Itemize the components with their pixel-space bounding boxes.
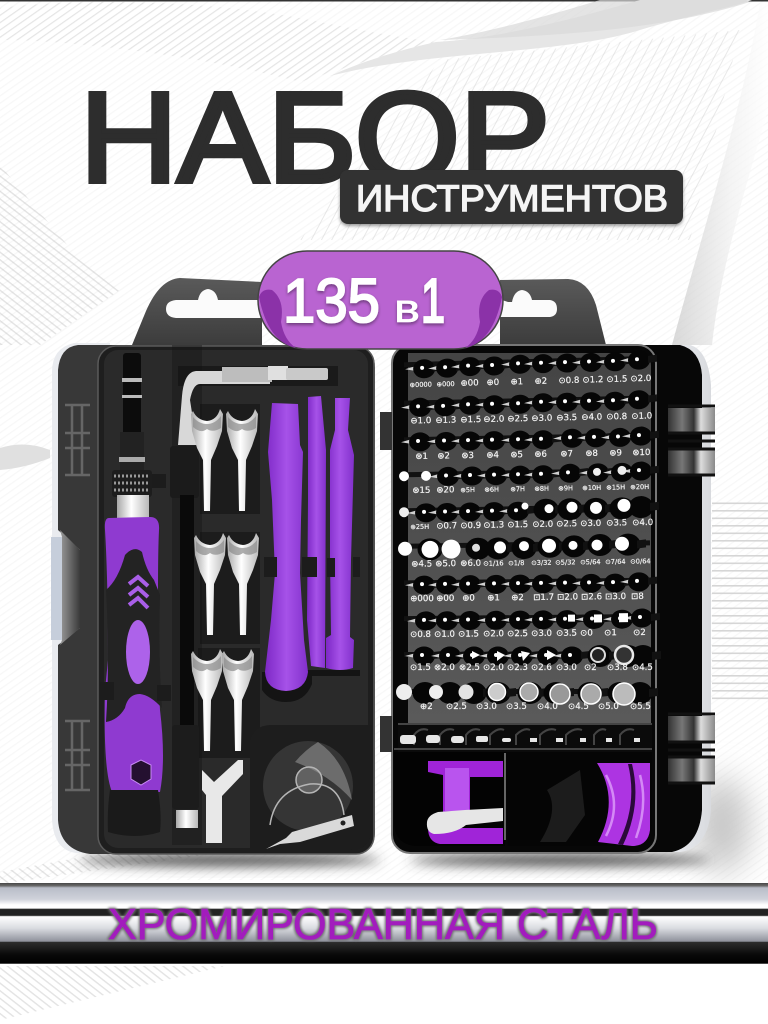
right latches xyxy=(380,406,715,783)
row 10: ⊙5.5 xyxy=(630,702,651,712)
row 7: ⊕000 xyxy=(410,594,434,604)
row 8: ⊙0 xyxy=(580,628,593,639)
row 4: ⊛20H xyxy=(630,483,649,491)
row 5: ⊛25H xyxy=(410,523,429,531)
row 1: ⊙1.5 xyxy=(606,374,627,385)
row 6: ⊙1/16 xyxy=(483,559,504,568)
purple pry tools xyxy=(265,396,354,691)
row 7: ⊡2.6 xyxy=(581,592,602,602)
row 6: ⊙5/32 xyxy=(555,558,576,567)
subtitle label: ИНСТРУМЕНТОВ xyxy=(356,178,668,219)
row 6: ⊙7/64 xyxy=(605,558,626,566)
row 4: ⊛7H xyxy=(510,485,525,493)
row 9: ⊙4.5 xyxy=(632,663,653,673)
row 8: ⊙2 xyxy=(633,628,646,638)
row 2: ⊖1.5 xyxy=(460,415,481,425)
row 3: ⊛6 xyxy=(534,450,547,460)
row 9: ⊙3.8 xyxy=(607,663,628,673)
row 4: ⊛15H xyxy=(606,483,625,492)
Y wrench xyxy=(202,760,243,843)
small bit row xyxy=(394,724,652,752)
row 10: ⊙3.0 xyxy=(476,702,497,712)
row 2 xyxy=(401,390,657,427)
row 4: ⊛6H xyxy=(484,486,499,494)
row 7: ⊕2 xyxy=(511,593,524,603)
row 8: ⊙1 xyxy=(604,628,617,638)
row 1: ⊕1 xyxy=(510,377,523,388)
row 1: ⊙2.0 xyxy=(630,374,651,384)
tool clips xyxy=(100,474,360,701)
outer silver edge xyxy=(52,343,110,853)
sim pin xyxy=(266,815,354,849)
row 7: ⊡2.0 xyxy=(557,592,578,603)
row 3: ⊛10 xyxy=(632,448,651,458)
row 3: ⊛5 xyxy=(510,450,523,460)
row 7: ⊡8 xyxy=(631,592,644,602)
row 7 xyxy=(404,572,657,604)
badge: 135 xyxy=(283,267,380,336)
row 2: ⊙1.0 xyxy=(631,411,652,422)
row 10: ⊙3.5 xyxy=(506,702,527,712)
row 5 xyxy=(399,496,659,532)
row 2: ⊖1.3 xyxy=(435,416,456,426)
row 3: ⊛2 xyxy=(437,451,450,462)
bit rows xyxy=(396,350,661,712)
row 6: ⊙3/32 xyxy=(531,559,552,567)
row 8: ⊙2.5 xyxy=(507,629,528,639)
row 5: ⊙0.9 xyxy=(460,521,481,531)
row 4 xyxy=(399,461,659,496)
row 3: ⊛3 xyxy=(461,451,474,461)
row 8: ⊙1.0 xyxy=(434,630,455,640)
row 9: ⊙2.0 xyxy=(483,663,504,673)
row 5: ⊙3.5 xyxy=(606,518,627,529)
row 7: ⊕0 xyxy=(462,594,475,604)
row 9: ⊙3.0 xyxy=(556,663,577,673)
row 1: ⊕00 xyxy=(460,378,479,389)
band caption: ХРОМИРОВАННАЯ СТАЛЬ xyxy=(108,900,658,949)
bent extension driver xyxy=(170,366,328,828)
badge: в xyxy=(394,287,420,331)
row 3: ⊛9 xyxy=(609,448,622,459)
row 4: ⊛9H xyxy=(558,484,573,493)
row 6: ⊙1/8 xyxy=(508,559,524,567)
row 3 xyxy=(401,426,659,462)
row 1: ⊙1.2 xyxy=(582,375,604,386)
bit panel xyxy=(408,353,651,724)
row 3: ⊛4 xyxy=(486,451,499,461)
row 10: ⊕2 xyxy=(420,702,433,712)
row 6: ⊛5.0 xyxy=(435,559,456,569)
tool slots xyxy=(172,345,360,845)
badge xyxy=(258,251,503,349)
purple coils xyxy=(597,763,650,846)
row 9: ⊗2.0 xyxy=(434,663,455,673)
row 9: ⊙2 xyxy=(584,663,597,673)
purple bracket xyxy=(428,761,503,844)
row 6: ⊛6.0 xyxy=(460,559,481,569)
silver tool xyxy=(427,808,503,834)
spanner bits xyxy=(191,409,259,751)
row 10 xyxy=(396,682,658,712)
title: НАБОР xyxy=(80,66,550,210)
row 8: ⊙0.8 xyxy=(410,630,431,640)
row 5: ⊙1.5 xyxy=(507,520,528,530)
right case xyxy=(380,345,715,853)
left case handle xyxy=(132,278,262,345)
row 2: ⊖1.0 xyxy=(410,416,431,427)
row 8: ⊙3.0 xyxy=(531,629,552,639)
badge: 1 xyxy=(421,267,445,336)
row 10: ⊙2.5 xyxy=(446,702,467,712)
suction tray xyxy=(250,725,372,850)
row 5: ⊙2.5 xyxy=(556,519,577,530)
row 6 xyxy=(398,533,651,570)
screwdriver xyxy=(105,353,163,836)
row 2: ⊙0.8 xyxy=(606,412,627,422)
left case xyxy=(51,343,375,854)
row 7: ⊕1 xyxy=(487,593,500,603)
left latches xyxy=(65,405,90,790)
bottom compartment xyxy=(394,752,652,846)
suction cup xyxy=(270,767,344,825)
row 10: ⊙5.0 xyxy=(598,702,619,712)
row 5: ⊙0.7 xyxy=(436,521,457,532)
row 8: ⊙2.0 xyxy=(483,629,504,639)
row 1: ⊕0000 xyxy=(409,381,432,389)
row 2: ⊖4.0 xyxy=(581,412,602,423)
row 1: ⊕2 xyxy=(534,377,547,387)
row 5: ⊙2.0 xyxy=(532,520,553,530)
row 4: ⊛5H xyxy=(460,486,475,494)
row 10: ⊙4.5 xyxy=(568,702,589,712)
row 1 xyxy=(404,350,658,390)
subtitle label xyxy=(340,170,683,224)
row 8: ⊙1.5 xyxy=(458,629,479,640)
row 5: ⊙1.3 xyxy=(483,520,504,531)
row 9: ⊙2.3 xyxy=(507,663,528,673)
row 5: ⊙4.0 xyxy=(632,518,653,528)
row 6: ⊙0/64 xyxy=(630,557,651,566)
row 2: ⊖2.5 xyxy=(507,414,528,424)
row 3: ⊛1 xyxy=(415,452,428,462)
row 2: ⊖3.5 xyxy=(556,413,577,423)
row 3: ⊛8 xyxy=(585,449,598,459)
outer shell xyxy=(640,345,711,852)
row 1: ⊙0.8 xyxy=(558,376,580,386)
case body xyxy=(58,345,375,854)
row 3: ⊛7 xyxy=(560,449,573,459)
row 4: ⊛20 xyxy=(436,485,455,496)
chrome band xyxy=(0,883,768,964)
row 8: ⊙3.5 xyxy=(556,629,577,639)
right case handle xyxy=(500,279,606,345)
row 2: ⊖3.0 xyxy=(531,414,552,424)
row 2: ⊖2.0 xyxy=(483,415,504,425)
row 6: ⊙5/64 xyxy=(580,558,601,566)
row 7: ⊡1.7 xyxy=(533,593,554,603)
row 9 xyxy=(404,645,661,673)
row 4: ⊛8H xyxy=(534,485,549,493)
row 1: ⊕000 xyxy=(436,380,455,388)
row 7: ⊕00 xyxy=(436,594,454,604)
row 5: ⊙3.0 xyxy=(580,519,601,529)
row 9: ⊙2.6 xyxy=(531,663,552,673)
row 6: ⊛4.5 xyxy=(411,559,432,570)
row 9: ⊗2.5 xyxy=(459,663,480,673)
row 8 xyxy=(404,608,660,640)
row 1: ⊕0 xyxy=(486,378,499,388)
row 9: ⊙1.5 xyxy=(410,663,431,673)
row 4: ⊛15 xyxy=(412,486,431,496)
row 7: ⊡3.0 xyxy=(605,592,626,602)
row 4: ⊛10H xyxy=(582,484,601,492)
row 10: ⊙4.0 xyxy=(537,702,558,712)
